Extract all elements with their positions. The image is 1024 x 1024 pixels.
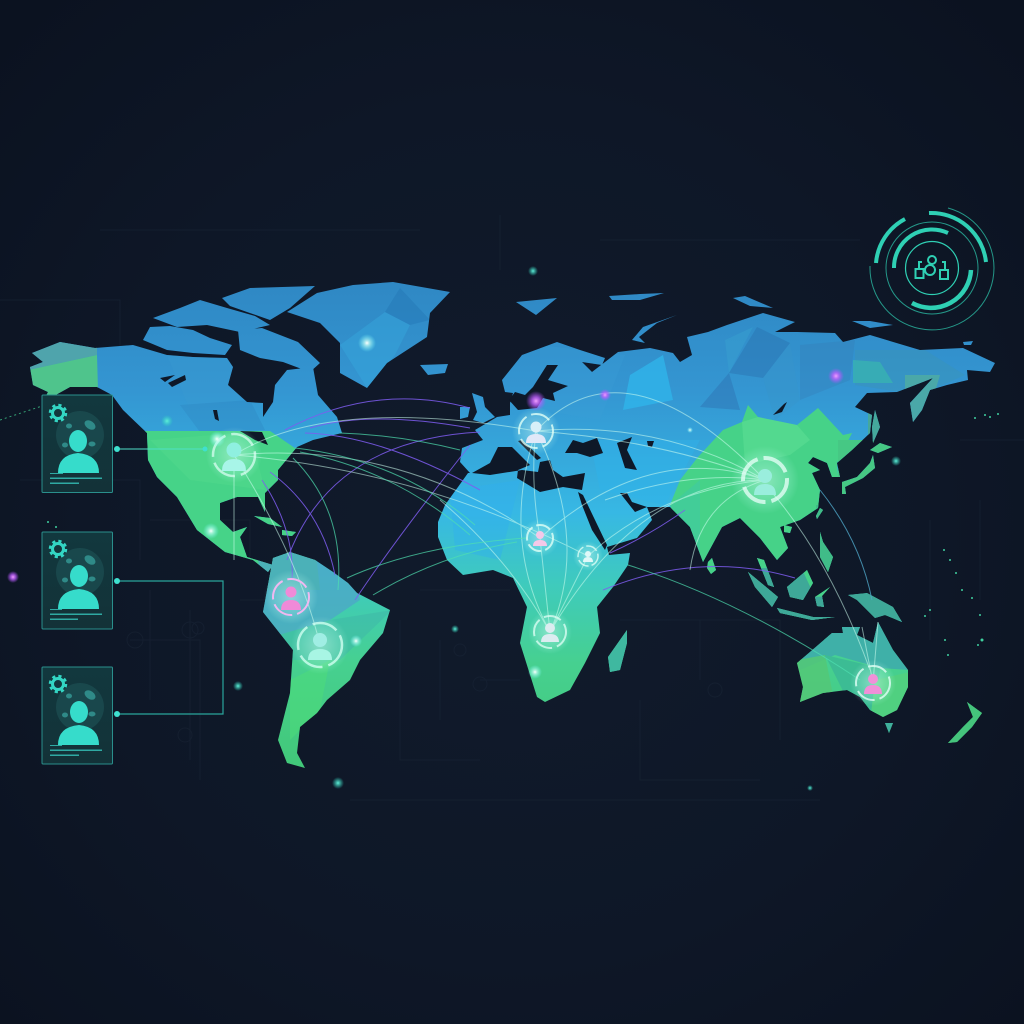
card connector: first card: [114, 446, 208, 452]
hub: Brazil: [291, 616, 349, 674]
green: New Zealand: [948, 702, 982, 743]
green: Japan and Sakhalin: [838, 440, 892, 494]
user card 3: [42, 667, 112, 764]
user card 2: [42, 532, 112, 629]
hub: East Africa: [573, 541, 603, 571]
hub: Southern Africa: [528, 610, 572, 654]
green: China and South Asia: [670, 405, 852, 640]
continents base fill: [30, 282, 995, 768]
world map: [0, 270, 1024, 780]
hub: Colombia: [264, 570, 318, 624]
inland seas: [160, 365, 787, 550]
green: USA and Mexico: [130, 431, 320, 590]
faint circuit pattern: [0, 215, 1024, 800]
bracket connector: second and third cards: [114, 578, 223, 717]
hub: West Africa: [521, 519, 559, 557]
Aleutian chain: [0, 405, 45, 420]
radial network emblem: [870, 208, 994, 330]
Madagascar: [608, 630, 627, 672]
teal: Indonesia and New Guinea: [748, 568, 902, 630]
Alaska colour bands: [30, 342, 97, 370]
hub: China: [731, 446, 799, 514]
hub: Australia: [850, 660, 896, 706]
user card 1: [42, 395, 112, 492]
Kamchatka teal: [905, 375, 940, 425]
Australia colours: [795, 620, 910, 670]
glowing particles: [7, 266, 901, 791]
hub: Europe: [512, 407, 560, 455]
blue-teal: northern South America: [258, 550, 360, 640]
connection arcs: [234, 393, 878, 683]
hub: North America: [206, 427, 262, 483]
Pacific island dots: [47, 413, 999, 656]
emblem icon: connected people: [916, 256, 948, 279]
low-poly facets and regional colours: [28, 288, 985, 746]
